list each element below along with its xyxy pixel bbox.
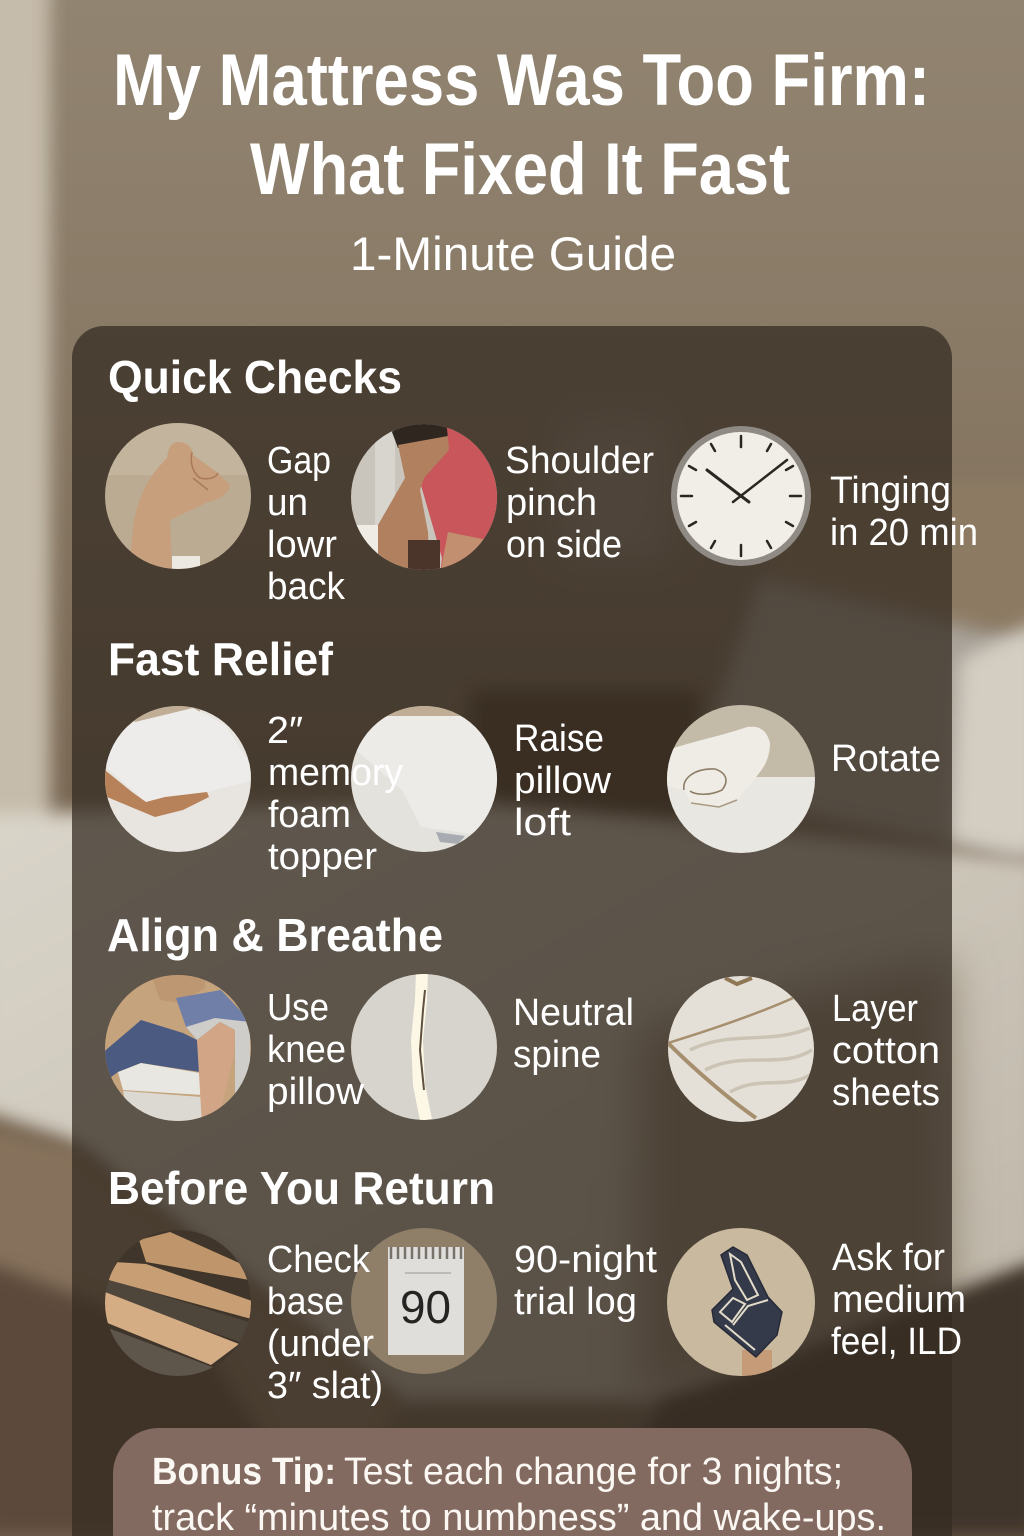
- icon: rolled topper: [667, 705, 815, 853]
- label: raise pillow loft: loft: [514, 802, 571, 844]
- label: rotate: Rotate: [831, 738, 941, 780]
- label: layer cotton sheets: sheets: [832, 1072, 940, 1114]
- label: neutral spine: [513, 992, 634, 1076]
- icon: wall clock: [671, 426, 811, 566]
- label: ask for medium feel, ILD: Ask for: [832, 1237, 945, 1279]
- label: gap in low back: Gap: [267, 440, 331, 482]
- icon: man with head in hand: [350, 420, 500, 575]
- icon: foam pointing finger: [665, 1225, 820, 1380]
- label: memory foam topper: 2″: [267, 710, 303, 752]
- icon: 90-day calendar: [351, 1228, 497, 1374]
- label: use knee pillow: Use: [267, 987, 329, 1029]
- label: layer cotton sheets: [832, 988, 940, 1114]
- label: layer cotton sheets: Layer: [832, 988, 918, 1030]
- title: [113, 40, 930, 210]
- icon: thick pillow: [351, 706, 497, 852]
- label: memory foam topper: topper: [268, 836, 377, 878]
- label: neutral spine: spine: [513, 1034, 601, 1076]
- label: shoulder pinch on side: [505, 440, 654, 566]
- heading: Fast Relief: Fast Relief: [108, 633, 334, 685]
- label: ask for medium feel, ILD: medium: [832, 1279, 966, 1321]
- callout: bonus tip: [113, 1428, 912, 1536]
- label: shoulder pinch on side: on side: [506, 524, 622, 566]
- label: check base under 3 inch slat: 3″ slat): [267, 1365, 383, 1407]
- subtitle: 1-Minute Guide: [350, 227, 676, 280]
- icon: neutral spine: [350, 970, 500, 1125]
- label: tingling in 20 min: Tinging: [830, 470, 951, 512]
- label: raise pillow loft: Raise: [514, 718, 604, 760]
- icon: rumpled cotton sheets: [665, 975, 820, 1125]
- callout: bonus tip: Bonus Tip:: [152, 1451, 336, 1493]
- heading: Quick Checks: Quick Checks: [108, 351, 402, 403]
- title: What Fixed It Fast: [250, 129, 790, 210]
- label: neutral spine: Neutral: [513, 992, 634, 1034]
- label: 90-night trial log: 90-night: [514, 1239, 657, 1281]
- label: tingling in 20 min: [830, 470, 978, 554]
- label: layer cotton sheets: cotton: [832, 1030, 940, 1072]
- label: raise pillow loft: pillow: [514, 760, 612, 802]
- label: gap in low back: back: [267, 566, 346, 608]
- icon: knee pillow sleeper: [105, 975, 251, 1121]
- label: raise pillow loft: [514, 718, 612, 844]
- label: tingling in 20 min: in 20 min: [830, 512, 978, 554]
- callout: bonus tip: Test each change for 3 nights;: [344, 1451, 843, 1493]
- label: ask for medium feel, ILD: feel, ILD: [831, 1321, 962, 1363]
- label: memory foam topper: foam: [268, 794, 351, 836]
- icon: pillow with arm: [105, 706, 251, 852]
- label: use knee pillow: knee: [267, 1029, 346, 1071]
- icon: raised fist: [105, 423, 251, 569]
- label: check base under 3 inch slat: base: [267, 1281, 344, 1323]
- label: check base under 3 inch slat: [267, 1239, 383, 1407]
- label: shoulder pinch on side: Shoulder: [505, 440, 654, 482]
- heading: Before You Return: Before You Return: [108, 1162, 495, 1214]
- heading: Align & Breathe: Align & Breathe: [107, 909, 443, 961]
- label: check base under 3 inch slat: Check: [267, 1239, 371, 1281]
- label: memory foam topper: [267, 710, 403, 878]
- label: gap in low back: un: [267, 482, 308, 524]
- label: gap in low back: lowr: [267, 524, 337, 566]
- icon: bed base slats: [105, 1230, 251, 1376]
- panel: guide card: [72, 326, 978, 1536]
- label: ask for medium feel, ILD: [831, 1237, 966, 1363]
- label: 90-night trial log: [514, 1239, 657, 1323]
- label: gap in low back: [267, 440, 346, 608]
- label: use knee pillow: pillow: [267, 1071, 365, 1113]
- label: memory foam topper: memory: [268, 752, 403, 794]
- icon: 90-day calendar: 90: [400, 1281, 451, 1333]
- label: 90-night trial log: trial log: [514, 1281, 637, 1323]
- label: use knee pillow: [267, 987, 365, 1113]
- label: check base under 3 inch slat: (under: [267, 1323, 374, 1365]
- label: shoulder pinch on side: pinch: [506, 482, 597, 524]
